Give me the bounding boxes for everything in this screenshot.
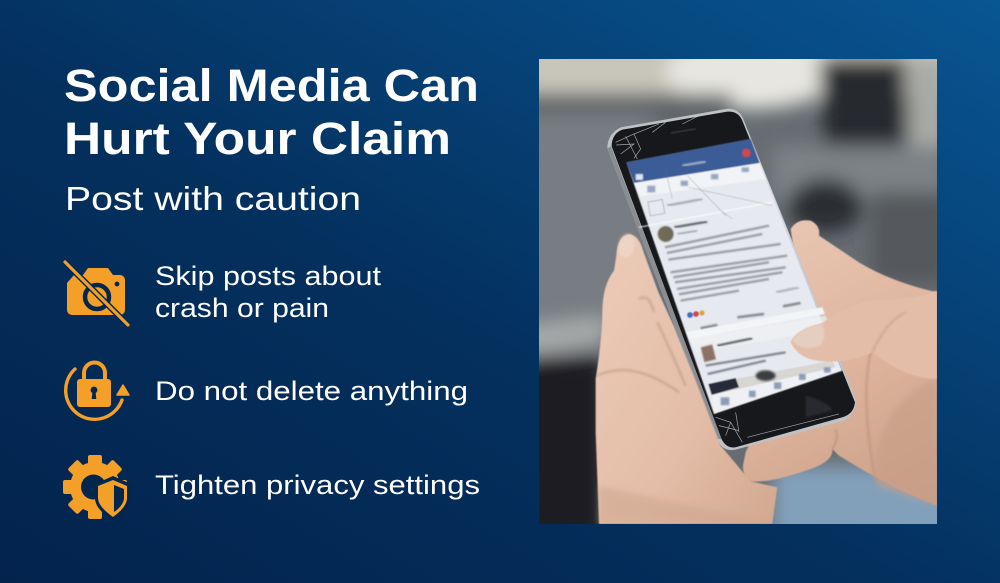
text: skip posts: crash or pain [155,293,329,323]
right thumb [791,291,937,379]
screen cracks [616,116,839,442]
text: skip posts: Skip posts about [155,261,382,291]
icon: padlock with circular arrow [66,363,129,419]
title: Hurt Your Claim [64,113,451,164]
left hand front [596,232,777,524]
icon: gear with shield [63,455,131,520]
icon: crossed-out camera [65,262,128,325]
phone screen [626,139,842,414]
title: Social Media Can [64,60,479,111]
photo: hands holding cracked phone in a car [519,36,959,542]
phone [607,109,856,450]
title [64,60,479,164]
subtitle: Post with caution [65,180,361,217]
text: tighten privacy: Tighten privacy settings [155,470,480,500]
text: skip posts [155,261,382,323]
text: do not delete: Do not delete anything [155,376,468,406]
right hand [743,220,937,506]
phone top speaker and reflection [671,129,696,133]
